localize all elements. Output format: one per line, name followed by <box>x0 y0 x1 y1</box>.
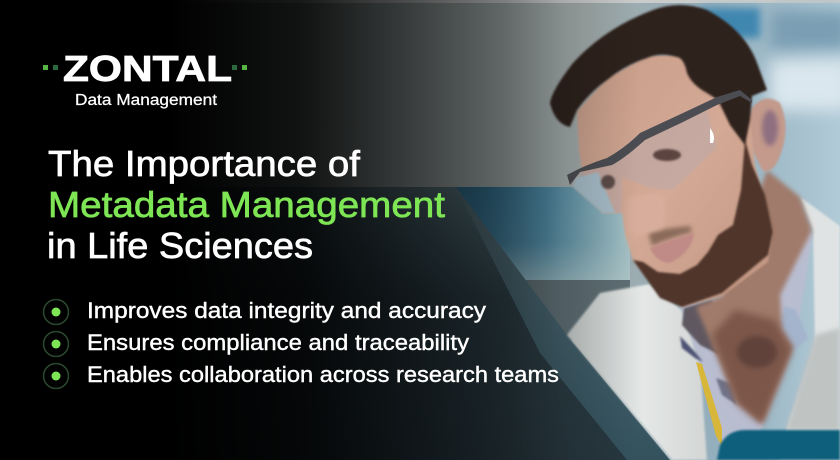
title line 1: The Importance of <box>48 143 361 184</box>
ear <box>743 99 786 171</box>
title <box>47 143 445 266</box>
logo tagline: Data Management <box>75 92 218 109</box>
lens <box>573 110 717 213</box>
title line 2: highlighted: Metadata Management <box>48 184 445 225</box>
logo left green squares <box>43 65 58 70</box>
lab coat <box>567 197 840 460</box>
stubble moustache <box>648 226 692 246</box>
bullet 1: Improves data integrity and accuracy <box>87 298 486 323</box>
bullet list <box>44 298 559 388</box>
face <box>577 55 773 307</box>
shirt <box>680 230 813 450</box>
mouth <box>650 233 694 263</box>
lanyard <box>696 362 722 446</box>
bottom blue object <box>717 430 840 460</box>
beard <box>633 140 773 307</box>
title line 3: in Life Sciences <box>47 225 313 266</box>
logo: Zontal Data Management <box>43 48 247 109</box>
bullet 3: Enables collaboration across research teams <box>87 362 559 387</box>
hair <box>550 5 767 145</box>
logo right green squares <box>232 65 247 70</box>
safety glasses <box>567 90 752 213</box>
bullet 2: Ensures compliance and traceability <box>87 330 469 355</box>
logo wordmark: ZONTAL <box>63 48 232 89</box>
nose <box>628 193 666 234</box>
frame <box>567 90 752 185</box>
neck and chest <box>696 170 812 424</box>
